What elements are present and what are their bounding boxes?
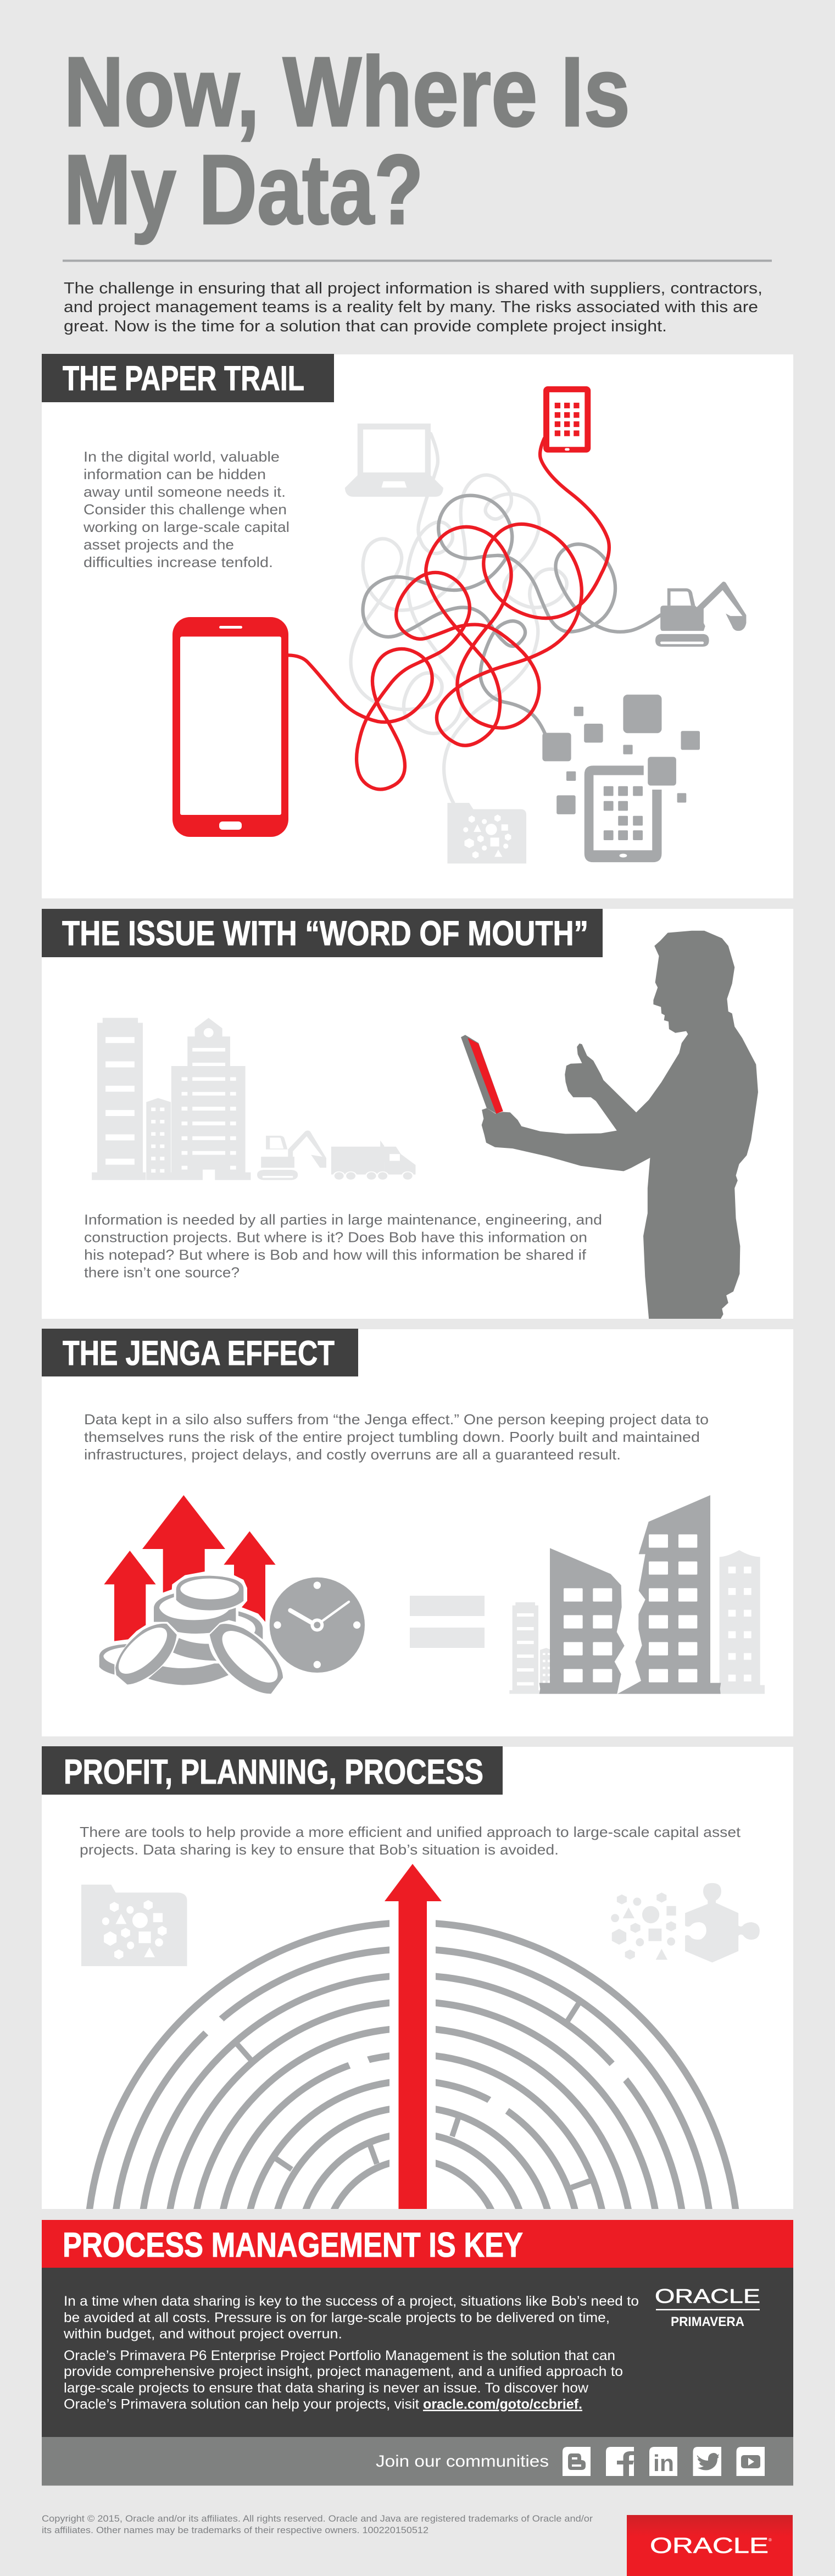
intro text [64, 280, 762, 335]
intro text: great. Now is the time for a solution that can provide complete project insight. [64, 318, 667, 335]
heading: profit planning process: PROFIT, PLANNING, PROCESS [64, 1753, 483, 1791]
icon: small building [146, 1098, 171, 1180]
heading: jenga effect [42, 1329, 358, 1376]
jenga text: Data kept in a silo also suffers from “the Jenga effect.” One person keeping project data to [84, 1411, 709, 1428]
maze [86, 1920, 739, 2209]
panel: the paper trail [42, 354, 793, 898]
community bar [42, 2437, 793, 2486]
icon: truck [331, 1140, 415, 1180]
logo: oracle footer: ORACLE [650, 2534, 769, 2558]
paper trail text: information can be hidden [84, 466, 266, 482]
icon: equals sign [410, 1596, 485, 1648]
heading: process management: PROCESS MANAGEMENT IS KEY [63, 2226, 523, 2264]
icons: folder and puzzle piece [81, 1883, 760, 1966]
paper trail text: working on large-scale capital [83, 519, 290, 535]
intro text: and project management teams is a reality felt by many. The risks associated with this are [64, 298, 758, 316]
icon: clock [270, 1578, 365, 1673]
word of mouth text: his notepad? But where is Bob and how will this information be shared if [84, 1246, 587, 1263]
icon: red arrows [104, 1495, 276, 1641]
icon: folder [447, 803, 526, 863]
icon: excavator [655, 581, 746, 647]
title: My Data? [64, 135, 424, 245]
icon: youtube [736, 2447, 765, 2476]
profit text: There are tools to help provide a more efficient and unified approach to large-scale capital asset [80, 1824, 741, 1840]
paper trail text: Consider this challenge when [84, 501, 287, 518]
profit text: projects. Data sharing is key to ensure that Bob’s situation is avoided. [80, 1841, 559, 1858]
paper trail text: asset projects and the [84, 536, 234, 553]
icon: blogger [563, 2447, 591, 2476]
logo: oracle footer [627, 2515, 793, 2576]
panel: process management is key [42, 2220, 793, 2486]
panel: jenga effect [42, 1329, 793, 1736]
word of mouth text: there isn’t one source? [84, 1264, 240, 1280]
heading: process management [42, 2220, 793, 2268]
intro text: The challenge in ensuring that all project information is shared with suppliers, contractors, [64, 280, 762, 297]
icon: red tablet [543, 386, 591, 453]
cable: light tangle [351, 434, 567, 803]
heading: word of mouth: THE ISSUE WITH “WORD OF MOUTH” [62, 914, 588, 953]
paper trail text [83, 448, 290, 570]
icon: laptop [345, 424, 443, 497]
icon: twitter [693, 2447, 721, 2476]
closing text: within budget, and without project overrun. [63, 2327, 342, 2342]
heading: the paper trail: THE PAPER TRAIL [63, 359, 304, 398]
heading: profit planning process [42, 1746, 503, 1795]
profit text [80, 1824, 741, 1858]
icon: cracked building [539, 1495, 721, 1694]
paper trail text: difficulties increase tenfold. [84, 554, 273, 570]
closing text [63, 2294, 639, 2412]
logo: oracle primavera: PRIMAVERA [671, 2314, 744, 2329]
closing text: oracle.com/goto/ccbrief. [423, 2397, 582, 2412]
illustration: arrows, coins and clock [99, 1495, 365, 1694]
logo: oracle primavera [655, 2285, 760, 2329]
closing text: Oracle’s Primavera solution can help your projects, visit [64, 2397, 419, 2412]
heading: the paper trail [42, 354, 334, 402]
closing text: Oracle’s Primavera P6 Enterprise Project Portfolio Management is the solution that can [64, 2348, 615, 2363]
logo: oracle primavera: ORACLE [655, 2285, 760, 2307]
closing text: In a time when data sharing is key to the success of a project, situations like Bob’s need to [64, 2294, 639, 2309]
icon: scattered shapes [611, 1892, 676, 1960]
icon: light buildings [509, 1550, 765, 1694]
arrow: red upward arrow [385, 1864, 442, 2209]
closing text: be avoided at all costs. Pressure is on for large-scale projects to be delivered on time, [64, 2310, 610, 2325]
icon: grey data squares [542, 695, 700, 814]
jenga text [84, 1411, 709, 1463]
icon: puzzle piece [685, 1883, 760, 1962]
panel: profit planning process [42, 1746, 793, 2209]
word of mouth text [84, 1211, 602, 1280]
icon: coin stack [99, 1576, 286, 1694]
copyright text: Copyright © 2015, Oracle and/or its affiliates. All rights reserved. Oracle and Java are registered trademarks of Oracle and/or [42, 2513, 593, 2524]
panel: word of mouth [42, 909, 793, 1319]
word of mouth text: Information is needed by all parties in large maintenance, engineering, and [84, 1211, 602, 1228]
icon: linkedin [649, 2447, 677, 2476]
closing text: provide comprehensive project insight, project management, and a unified approach to [64, 2364, 623, 2379]
icon: tall building [92, 1018, 146, 1180]
copyright text [42, 2513, 593, 2535]
icon: grey tablet [584, 765, 661, 862]
icon: folder with shapes [81, 1885, 187, 1966]
skyline and vehicles [92, 1018, 415, 1180]
icon: clock tower building [165, 1018, 250, 1180]
word of mouth text: construction projects. But where is it? Does Bob have this information on [84, 1229, 587, 1245]
title: Now, Where Is [64, 37, 630, 147]
jenga text: infrastructures, project delays, and costly overruns are all a guaranteed result. [84, 1446, 621, 1463]
icon: linkedin: in [653, 2450, 674, 2476]
paper trail text: away until someone needs it. [84, 484, 286, 500]
icon: facebook [606, 2447, 634, 2476]
community bar: Join our communities [376, 2452, 549, 2470]
icon: light excavator [257, 1130, 326, 1180]
jenga text: themselves runs the risk of the entire project tumbling down. Poorly built and maintained [84, 1429, 700, 1445]
logo: oracle footer: ® [769, 2538, 772, 2542]
illustration: man with tablet [461, 931, 758, 1319]
cable: grey tangle [363, 496, 660, 734]
tangled cables and device icons [288, 386, 746, 863]
heading: jenga effect: THE JENGA EFFECT [63, 1334, 335, 1373]
illustration: collapsing buildings [509, 1495, 765, 1694]
cable: red tangle [288, 438, 609, 790]
title [64, 37, 630, 245]
icon: large red phone [172, 617, 288, 837]
heading: word of mouth [42, 909, 603, 957]
paper trail text: In the digital world, valuable [84, 448, 280, 465]
closing text: large-scale projects to ensure that data sharing is never an issue. To discover how [64, 2380, 589, 2396]
copyright text: its affiliates. Other names may be trademarks of their respective owners. 100220150512 [42, 2525, 428, 2535]
